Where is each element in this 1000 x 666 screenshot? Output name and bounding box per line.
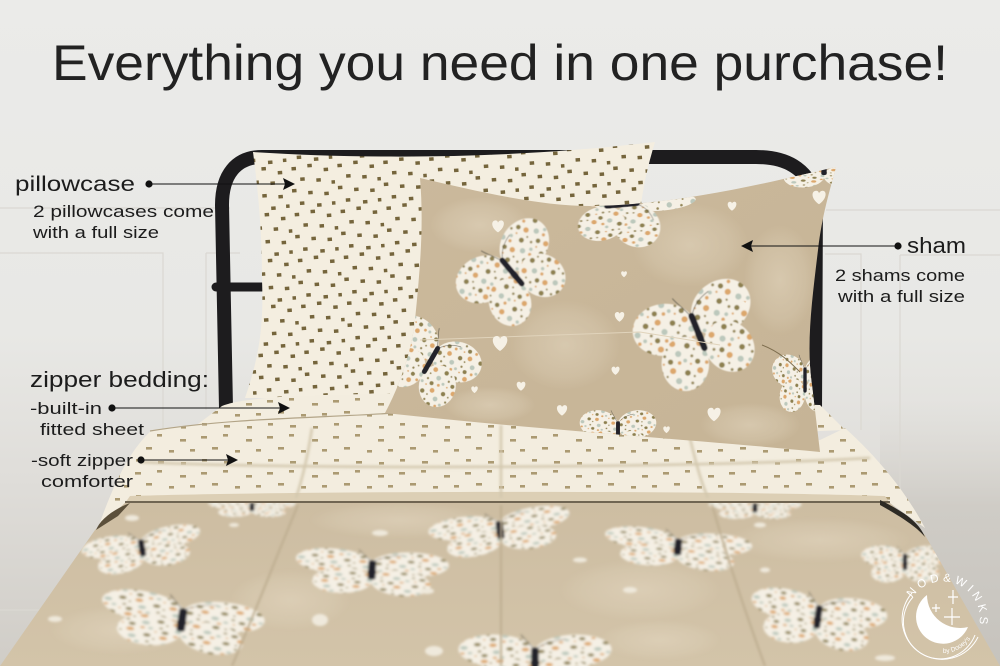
logo: Nod & Winks: NOD&WINKS [906, 574, 988, 624]
arrow: pillowcase [145, 178, 295, 190]
arrow: sham [741, 240, 902, 252]
label: zipper bedding: zipper bedding: [30, 367, 209, 392]
comforter [0, 498, 1000, 666]
label: pillowcase [15, 173, 214, 242]
label: zipper bedding: comforter [41, 472, 133, 491]
title: Everything you need in one purchase! [52, 35, 948, 91]
logo: Nod & Winks [902, 574, 988, 660]
pillowcase [245, 142, 655, 400]
label: sham: with a full size [837, 287, 965, 306]
label: pillowcase: pillowcase [15, 173, 135, 196]
comforter butterfly print [48, 498, 953, 666]
sham [385, 167, 836, 452]
label: sham: sham [907, 233, 966, 258]
label: zipper bedding: fitted sheet [40, 420, 144, 439]
label: pillowcase: 2 pillowcases come [33, 202, 214, 221]
headboard [216, 157, 816, 412]
label: sham [835, 233, 966, 306]
logo: Nod & Winks: by Dooey's [943, 637, 970, 654]
arrow: soft zipper comforter [137, 454, 238, 466]
label: sham: 2 shams come [835, 266, 965, 285]
fitted sheet and comforter top [98, 394, 925, 528]
label: zipper bedding: -soft zipper [31, 451, 133, 470]
sham butterfly print [398, 167, 836, 442]
label: zipper bedding: -built-in [30, 399, 102, 418]
arrow: built-in fitted sheet [108, 402, 290, 414]
label: zipper bedding [30, 367, 209, 491]
label: pillowcase: with a full size [32, 223, 159, 242]
